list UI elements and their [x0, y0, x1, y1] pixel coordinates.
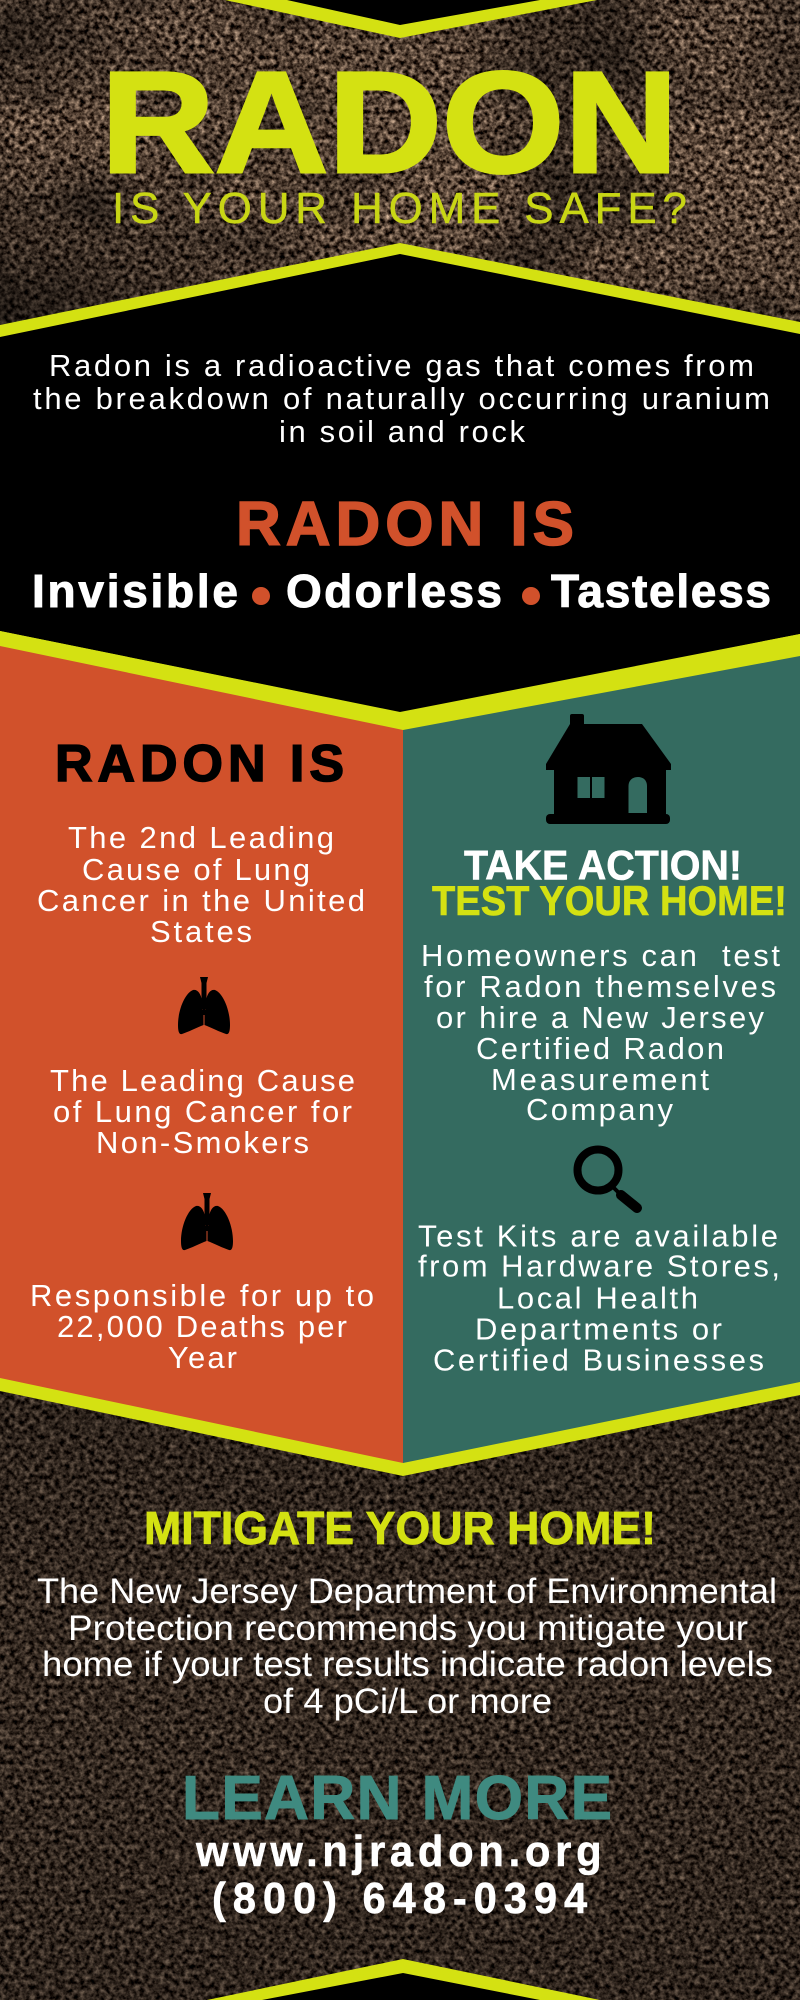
top chevron band: [225, 0, 597, 38]
fact: second leading cause: [37, 820, 365, 949]
fact: second leading cause: States: [150, 914, 252, 949]
panel: teal take action: [403, 656, 800, 1463]
heading: RADON IS: RADON IS: [236, 490, 574, 559]
text: mitigation recommendation: of 4 pCi/L or more: [263, 1682, 552, 1721]
heading: RADON IS: RADON IS: [55, 735, 344, 793]
text: homeowners can test: Company: [526, 1092, 674, 1127]
text: test kits: Departments or: [475, 1312, 722, 1346]
properties list: [32, 565, 771, 617]
fact: second leading cause: The 2nd Leading: [68, 820, 334, 855]
intro text: in soil and rock: [279, 414, 526, 449]
icon: lungs: [178, 977, 230, 1034]
text: test kits: from Hardware Stores,: [418, 1248, 780, 1284]
text: test kits: Test Kits are available: [418, 1218, 778, 1254]
intro text: the breakdown of naturally occurring uranium: [33, 381, 770, 416]
text: homeowners can test: for Radon themselves: [424, 969, 776, 1004]
fact: second leading cause: Cause of Lung: [82, 852, 310, 887]
bottom chevron band: [207, 1959, 600, 2000]
properties list: Odorless: [286, 565, 502, 617]
heading: learn more: LEARN MORE: [182, 1764, 612, 1833]
fact: leading cause for non-smokers: of Lung Cancer for: [53, 1094, 352, 1129]
fact: deaths per year: [30, 1278, 374, 1375]
text: homeowners can test: Homeowners can test: [421, 938, 780, 973]
text: mitigation recommendation: home if your test results indicate radon levels: [42, 1645, 773, 1684]
fact: deaths per year: Responsible for up to: [30, 1278, 374, 1313]
text: test kits: [418, 1218, 780, 1378]
panel: black introduction: [0, 243, 800, 730]
text: mitigation recommendation: [37, 1572, 777, 1721]
text: mitigation recommendation: The New Jersey Department of Environmental: [37, 1572, 777, 1611]
icon: house: [546, 714, 671, 824]
fact: deaths per year: 22,000 Deaths per: [57, 1309, 347, 1344]
properties list: Invisible: [32, 565, 238, 617]
heading: mitigate your home: MITIGATE YOUR HOME!: [144, 1502, 656, 1554]
properties list: Tasteless: [551, 565, 771, 617]
icon: magnifying glass: [578, 1150, 637, 1208]
text: homeowners can test: Certified Radon: [476, 1031, 724, 1066]
title: RADON: RADON: [101, 42, 678, 203]
website: www.njradon.org: [195, 1827, 602, 1876]
fact: second leading cause: Cancer in the United: [37, 883, 365, 918]
text: test kits: Local Health: [497, 1280, 698, 1316]
fact: leading cause for non-smokers: Non-Smokers: [96, 1125, 309, 1160]
icon: lungs: [181, 1193, 233, 1250]
intro text: [33, 348, 770, 449]
text: mitigation recommendation: Protection recommends you mitigate your: [68, 1609, 748, 1648]
text: test kits: Certified Businesses: [433, 1342, 764, 1378]
text: homeowners can test: Measurement: [491, 1062, 709, 1097]
panel: orange radon facts: [0, 646, 403, 1463]
subtitle: IS YOUR HOME SAFE?: [112, 184, 687, 233]
fact: leading cause for non-smokers: The Leading Cause: [50, 1063, 355, 1098]
yellow border of the lower panels: [0, 631, 800, 1476]
phone number: (800) 648-0394: [212, 1874, 587, 1923]
text: homeowners can test: or hire a New Jersey: [436, 1000, 764, 1035]
fact: leading cause for non-smokers: [50, 1063, 355, 1160]
intro text: Radon is a radioactive gas that comes from: [49, 348, 754, 383]
text: homeowners can test: [421, 938, 780, 1127]
fact: deaths per year: Year: [168, 1340, 237, 1375]
heading: take action: TAKE ACTION!: [464, 842, 742, 888]
